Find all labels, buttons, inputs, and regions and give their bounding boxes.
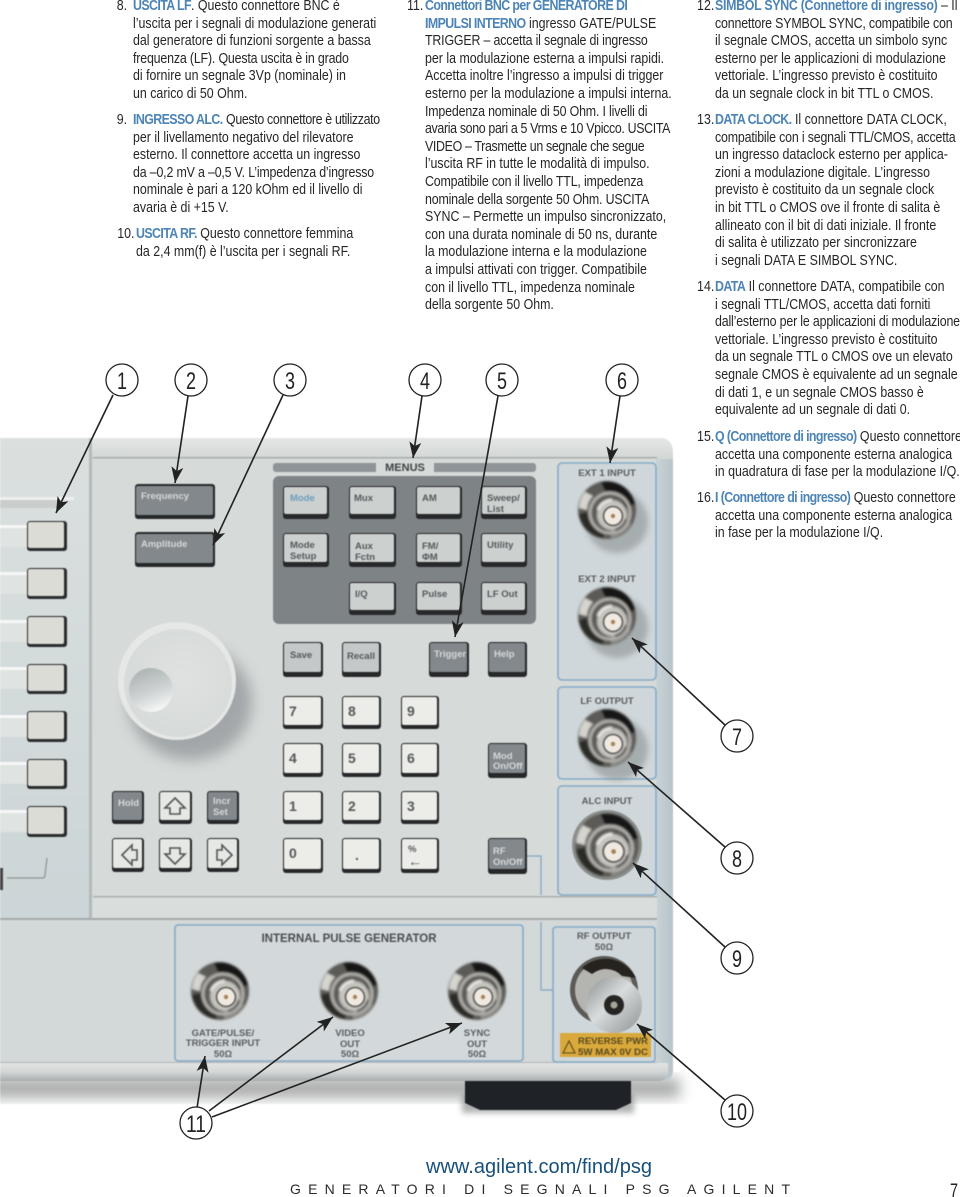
connector: gate/pulse/trigger input: 50Ω [214,1049,232,1060]
function buttons: Save [290,650,312,661]
warning label: REVERSE PWR [578,1036,648,1047]
text: item 8: un carico di 50 Ohm. [133,86,247,102]
text: item 12: da un segnale clock in bit TTL o CMOS. [715,86,933,102]
text: item 13: DATA CLOCK. Il connettore DATA CLOCK, [715,112,947,128]
text: item 15: in quadratura di fase per la modulazione I/Q. [715,464,960,480]
text: item 8: di fornire un segnale 3Vp (nominale) in [133,68,346,84]
menu buttons: ΦM [422,552,438,563]
text: 13. [697,112,714,128]
function buttons: Trigger [434,649,467,660]
text: item 11: della sorgente 50 Ohm. [425,297,554,313]
text: 10. [117,226,134,242]
button: Mod On/Off: On/Off [493,761,523,772]
callout 7: 7 [732,724,742,751]
text: item 11: VIDEO – Trasmette un segnale che segue [425,139,644,155]
panel: internal pulse generator [175,925,523,1061]
numeric keypad: 6 [407,750,415,766]
callout 5: 5 [497,368,507,395]
text: item 13: un ingresso dataclock esterno per applica- [715,147,948,163]
arrow keys and hold: Incr [213,796,231,807]
text: item 12 [697,0,957,102]
text: item 11: TRIGGER – accetta il segnale di ingresso [425,33,648,49]
arrow keys and hold: Set [213,807,229,818]
text: item 11: Impedenza nominale di 50 Ohm. I livelli di [425,104,647,120]
connector: sync out [448,962,506,1060]
callout 6: 6 [617,368,627,395]
numeric keypad: 8 [348,703,356,719]
text: item 10 [117,226,354,260]
lower band [0,918,657,920]
connector: ALC input [572,810,642,880]
shadow under foot [462,1095,634,1113]
panel: internal pulse generator: INTERNAL PULSE GENERATOR [261,933,437,945]
text: item 13: previsto è costituito da un segnale clock [715,182,934,198]
text: item 16: in fase per la modulazione I/Q. [715,525,883,541]
panel: softkey strip [0,438,92,918]
panel: menus keypad: MENUS [385,462,425,474]
text: item 11: per la modulazione esterna a impulsi rapidi. [425,51,664,67]
numeric keypad: ← [408,853,422,869]
connector: gate/pulse/trigger input [186,962,260,1060]
text: item 11: nominale della sorgente 50 Ohm. USCITA [425,192,649,208]
text: item 11: esterno per la modulazione a impulsi interna. [425,86,672,102]
text: item 14: equivalente ad un segnale di dati 0. [715,402,910,418]
menu buttons: Mode [290,540,315,551]
panel: RF output [553,927,655,1062]
connector: sync out: OUT [467,1039,487,1050]
text: item 11: IMPULSI INTERNO ingresso GATE/PULSE [425,16,656,32]
callout 6 [606,364,638,463]
function buttons: Recall [347,651,375,662]
callout 8: 8 [732,846,742,873]
numeric keypad: 0 [289,845,297,861]
text: item 16 [697,490,956,541]
button: Amplitude [135,532,215,567]
text: item 10: da 2,4 mm(f) è l’uscita per i segnali RF. [136,244,350,260]
text: item 13: i segnali DATA E SIMBOL SYNC. [715,253,897,269]
connector: video out: OUT [340,1039,360,1050]
text: item 13: di salita è utilizzato per sincronizzare [715,235,917,251]
numeric keypad: 5 [348,750,356,766]
text: item 14: di dati 1, e un segnale CMOS basso è [715,385,924,401]
callout 10 [637,1024,753,1127]
callout 9 [633,863,753,974]
menu buttons: Utility [487,540,514,551]
connector: video out [320,962,378,1060]
menu buttons: Mux [354,493,374,504]
numeric keypad: % [408,844,417,855]
menu buttons: Aux [355,541,374,552]
menu buttons: Sweep/ [487,493,520,504]
text: item 13 [697,112,956,269]
button: RF On/Off: RF [493,846,506,857]
warning label: 5W MAX 0V DC [578,1047,648,1058]
callout 1: 1 [117,368,127,395]
callout 3 [213,364,306,545]
connector: sync out: SYNC [464,1028,490,1039]
numeric keypad [283,696,439,873]
connector: LF output [578,709,648,780]
connector: EXT 1 [578,481,648,553]
numeric keypad: 4 [289,750,297,766]
connector: gate/pulse/trigger input: TRIGGER INPUT [186,1038,260,1049]
text: item 8: dal generatore di funzioni sorgente a bassa [133,33,371,49]
text: item 11: SYNC – Permette un impulso sincronizzato, [425,209,666,225]
text: item 11: avaria sono pari a 5 Vrms e 10 Vpicco. USCITA [425,121,670,137]
text: item 14: da un segnale TTL o CMOS ove un elevato [715,349,953,365]
menu buttons: LF Out [487,589,518,600]
callout 10: 10 [727,1099,747,1126]
menu buttons: I/Q [355,589,368,600]
text: item 13: allineato con il bit di dati iniziale. Il fronte [715,218,936,234]
text: item 12: vettoriale. L’ingresso previsto è costituito [715,68,938,84]
panel: ALC input: ALC INPUT [582,796,633,807]
button: Mod On/Off: Mod [493,751,513,762]
connector: video out: VIDEO [335,1028,365,1039]
connector: RF output [570,956,642,1033]
footer title: GENERATORI DI SEGNALI PSG AGILENT [290,1181,790,1197]
text: item 14: vettoriale. L’ingresso previsto è costituito [715,332,938,348]
button: Mod On/Off [488,743,527,778]
text: 16. [697,490,714,506]
button: Frequency [135,484,215,519]
text: item 12: esterno per le applicazioni di modulazione [715,51,946,67]
text: item 9: avaria è di +15 V. [133,200,229,216]
numeric keypad: 1 [289,798,297,814]
numeric keypad: 2 [348,798,356,814]
menu buttons: Setup [290,551,317,562]
numeric keypad: . [355,847,359,863]
text: item 14 [697,279,960,418]
numeric keypad: 9 [407,703,415,719]
text: item 15: Q (Connettore di ingresso) Questo connettore [715,429,960,445]
button: RF On/Off [488,838,527,874]
arrow keys and hold [112,791,239,872]
instrument body [0,438,673,1081]
callout 3: 3 [285,368,295,395]
text: item 9: nominale è pari a 120 kOhm ed il livello di [133,182,362,198]
shadow under instrument [0,1078,680,1098]
menu buttons [283,486,527,615]
text: item 8 [117,0,376,102]
text: item 11: con il livello TTL, impedenza nominale [425,280,635,296]
text: item 11: con una durata nominale di 50 ns, durante [425,227,657,243]
menu buttons: Fctn [355,552,375,563]
callout 5 [455,364,518,637]
warning label [560,1033,651,1058]
callout 11 [180,1017,462,1139]
connector: gate/pulse/trigger input: GATE/PULSE/ [192,1028,255,1039]
text: item 9: esterno. Il connettore accetta un ingresso [133,147,360,163]
callout 1 [56,364,138,513]
callout 7 [632,638,753,752]
panel: EXT inputs: EXT 2 INPUT [578,574,636,585]
callout 9: 9 [732,946,742,973]
text: item 15 [697,429,960,480]
function buttons: Help [494,649,515,660]
panel: LF output [558,687,656,780]
text: item 11: la modulazione interna e la modulazione [425,244,647,260]
arrow keys and hold: Hold [118,798,139,809]
text: item 11 [407,0,672,313]
text: item 12: il segnale CMOS, accetta un simbolo sync [715,33,947,49]
connector: EXT 2 [578,587,648,658]
button: Frequency: Frequency [141,491,190,502]
panel: ALC input [558,786,656,895]
text: item 9: INGRESSO ALC. Questo connettore è utilizzato [133,112,380,128]
text: item 13: compatibile con i segnali TTL/CMOS, accetta [715,130,955,146]
text: 15. [697,429,714,445]
button: Amplitude: Amplitude [141,539,187,550]
panel: menus keypad [273,461,536,624]
text: item 14: DATA Il connettore DATA, compatibile con [715,279,945,295]
text: item 10: USCITA RF. Questo connettore femmina [136,226,353,242]
text: 9. [117,112,127,128]
text: item 11: l’uscita RF in tutte le modalità di impulso. [425,156,650,172]
button: RF On/Off: On/Off [493,857,523,868]
function buttons [283,642,527,677]
text: item 14: segnale CMOS è equivalente ad un segnale [715,367,958,383]
text: item 11: a impulsi attivati con trigger. Compatibile [425,262,647,278]
connector: sync out: 50Ω [468,1049,486,1060]
menu buttons: Mode [290,493,315,504]
panel: EXT inputs: EXT 1 INPUT [578,468,636,479]
text: item 12: connettore SYMBOL SYNC, compatibile con [715,16,953,32]
panel: RF output: 50Ω [595,942,613,953]
text: item 8: l’uscita per i segnali di modulazione generati [133,16,376,32]
text: item 13: in bit TTL o CMOS ove il fronte di salita è [715,200,940,216]
text: item 16: accetta una componente esterna analogica [715,508,952,524]
text: item 13: zioni a modulazione digitale. L’ingresso [715,165,930,181]
menu buttons: List [487,504,505,515]
text: item 9: per il livellamento negativo del rilevatore [133,130,354,146]
text: item 14: dall’esterno per le applicazioni di modulazione [715,314,960,330]
callout 11: 11 [186,1111,206,1138]
menu buttons: Pulse [422,589,447,600]
callout 4 [409,364,441,458]
numeric keypad: 3 [407,798,415,814]
callout 8 [628,762,753,874]
text: item 8: frequenza (LF). Questa uscita è in grado [133,51,349,67]
text: item 16: I (Connettore di ingresso) Questo connettore [715,490,956,506]
callout 2 [175,364,207,483]
menu buttons: FM/ [422,541,439,552]
text: item 9 [117,112,380,216]
text: item 14: i segnali TTL/CMOS, accetta dati forniti [715,297,930,313]
text: item 11: Compatibile con il livello TTL, impedenza [425,174,643,190]
panel: RF output: RF OUTPUT [577,931,631,942]
callout 2: 2 [186,368,196,395]
footer url: www.agilent.com/find/psg [425,1156,652,1178]
callout 4: 4 [420,368,430,395]
text: item 9: da –0,2 mV a –0,5 V. L’impedenza d’ingresso [133,165,374,181]
instrument foot [465,1079,631,1110]
connector: video out: 50Ω [341,1049,359,1060]
text: item 11: Accetta inoltre l’ingresso a impulsi di trigger [425,68,663,84]
text: 14. [697,279,714,295]
menu buttons: AM [422,493,437,504]
text: item 15: accetta una componente esterna analogica [715,447,952,463]
numeric keypad: 7 [289,703,297,719]
knob [118,622,252,760]
panel: EXT inputs [558,463,656,680]
softkey buttons [27,521,67,837]
panel: LF output: LF OUTPUT [580,696,634,707]
